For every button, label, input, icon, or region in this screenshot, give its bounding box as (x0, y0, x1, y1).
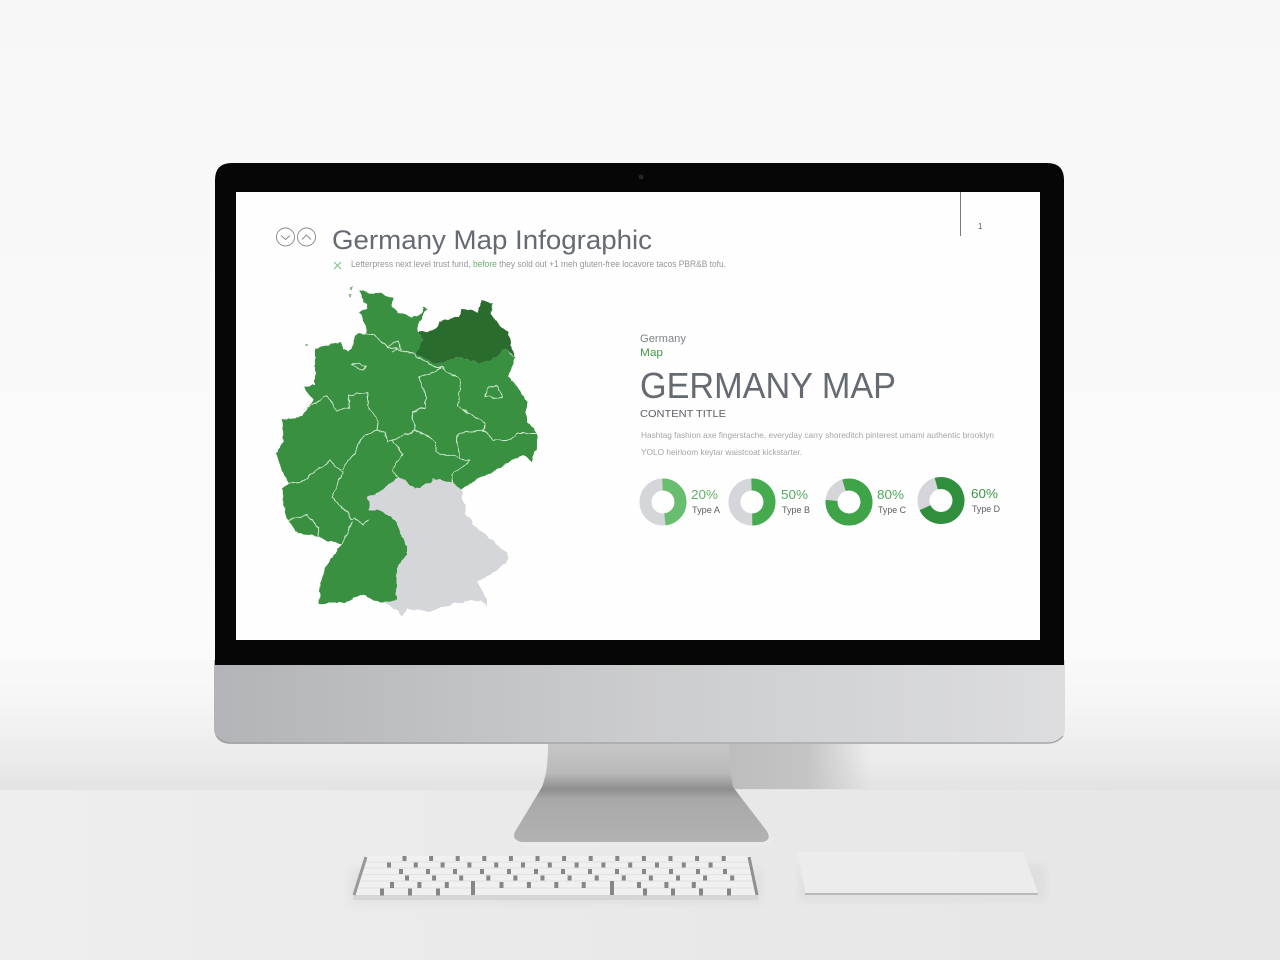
donut: Type D (920, 479, 1000, 522)
islands (305, 286, 353, 346)
wall shadow beside stand (730, 744, 870, 789)
screen slide (236, 192, 1040, 640)
main heading: GERMANY MAP (640, 365, 896, 406)
subtitle: Letterpress next level trust fund, before they sold out +1 meh gluten-free locavore tacos PBR&B tofu. (351, 259, 726, 269)
webcam (638, 174, 644, 180)
donut: Type B (734, 484, 810, 520)
state borders (288, 333, 537, 544)
donut: Type B: Type B (782, 505, 810, 515)
body text: YOLO heirloom keytar waistcoat kickstarter. (641, 447, 802, 457)
icon: green cross (334, 262, 341, 269)
donut: Type B: 50% (781, 487, 808, 502)
navigation icons (276, 228, 316, 246)
donut: Type C: 80% (877, 487, 904, 502)
desk surface (0, 790, 1280, 960)
donut: Type A: 20% (691, 487, 718, 502)
donut: Type C (828, 481, 906, 523)
donut: Type A (646, 484, 720, 520)
region: main green states (276, 290, 537, 603)
body text (641, 430, 994, 457)
map of Germany (276, 286, 537, 617)
region: Bavaria (367, 477, 508, 617)
chin bottom edge (217, 736, 1063, 743)
donut: Type D: 60% (971, 486, 998, 501)
page number marker: 1 (978, 222, 983, 231)
donut: Type C: Type C (878, 505, 906, 515)
keyboard (350, 856, 762, 904)
monitor chin (214, 660, 1065, 744)
monitor bezel (215, 163, 1064, 665)
donut: Type D: Type D (972, 504, 1000, 514)
region: Mecklenburg-Vorpommern (415, 300, 514, 365)
heading: Germany: Germany (640, 333, 686, 345)
page number marker (960, 192, 983, 236)
donut: Type A: Type A (692, 505, 720, 515)
trackpad (797, 852, 1046, 901)
content title: CONTENT TITLE (640, 408, 726, 420)
body text: Hashtag fashion axe fingerstache, everyday carry shoreditch pinterest umami authentic brooklyn (641, 430, 994, 440)
monitor stand (513, 744, 771, 846)
heading: Map: Map (640, 347, 663, 359)
title: Germany Map Infographic (332, 225, 652, 255)
